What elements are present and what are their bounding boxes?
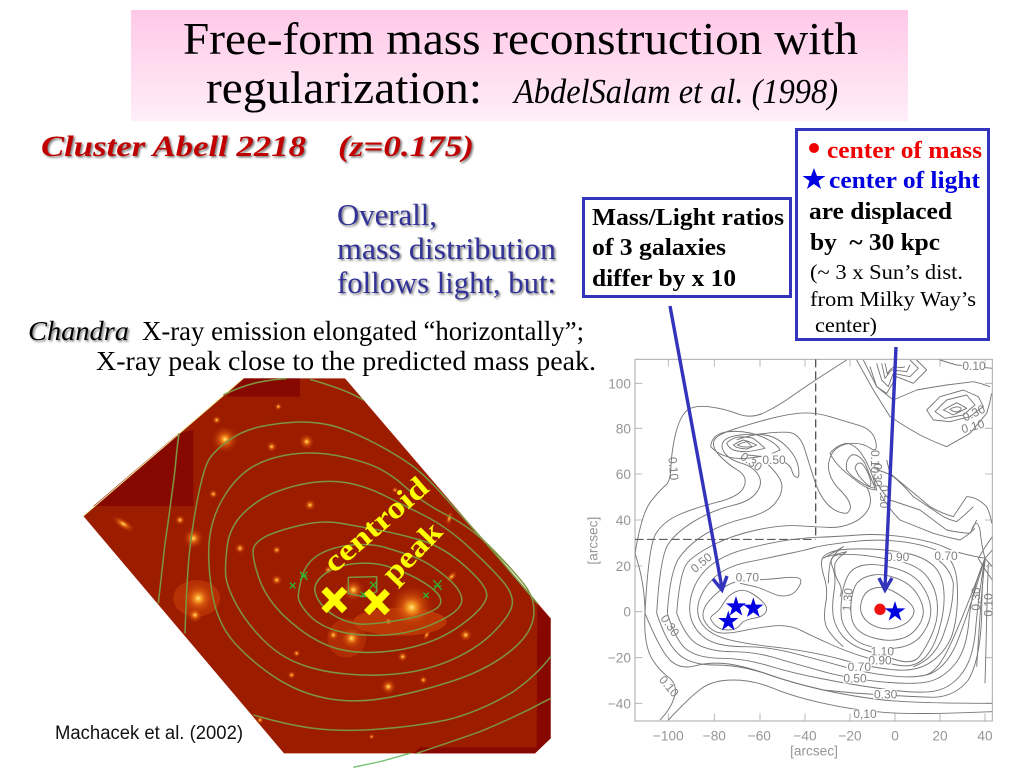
title banner: AbdelSalam et al. (1998)	[512, 72, 838, 111]
contour value labels: 0.90	[886, 550, 910, 564]
axis tick labels: −20	[838, 729, 862, 744]
contour value labels: 0.10	[656, 673, 682, 700]
central small peak	[830, 443, 877, 490]
callout: mass/light ratios: Mass/Light ratios	[592, 205, 784, 231]
contour value labels: 0.50	[877, 485, 891, 509]
contour value labels: 0.70	[848, 660, 871, 674]
text block: overall statement: mass distribution	[337, 231, 557, 266]
small green X-ray markers	[290, 572, 442, 598]
axis tick labels: −40	[793, 729, 817, 744]
axis tick labels: 40	[977, 729, 993, 744]
axis tick labels: [arcsec]	[790, 743, 838, 758]
callout: mass/light ratios: of 3 galaxies	[592, 235, 726, 261]
icon: red dot	[809, 143, 819, 153]
panel: Chandra X-ray image	[83, 378, 551, 767]
X-ray contours	[158, 379, 551, 753]
contour value labels: 0.30	[960, 402, 988, 424]
lower right fan of lines	[927, 558, 985, 675]
contour value labels: 0.70	[736, 571, 759, 585]
contour value labels: 1.30	[840, 587, 856, 612]
contour value labels: 0.30	[870, 463, 884, 487]
callout: centers displaced: center)	[815, 313, 877, 337]
contour value labels: 0.30	[738, 449, 765, 474]
callout: centers displaced: from Milky Way’s	[810, 287, 976, 311]
label: centroid: centroid	[317, 470, 435, 579]
contour value labels: 0.10	[665, 456, 681, 481]
axis tick labels: 60	[616, 467, 631, 482]
contour value labels: 0.10	[868, 450, 882, 474]
galaxies	[109, 403, 472, 740]
heading: cluster name: (z=0.175)	[338, 130, 474, 163]
text block: overall statement: Overall,	[337, 197, 437, 232]
callout: centers displaced: (~ 3 x Sun’s dist.	[810, 260, 963, 284]
axis tick labels	[585, 376, 993, 758]
arrow: to centers	[879, 347, 896, 590]
contour value labels: 0.70	[934, 549, 958, 563]
yellow crosses	[324, 589, 387, 613]
axis tick labels: [arcsec]	[585, 517, 600, 565]
text block: overall statement: follows light, but:	[337, 265, 556, 300]
plot frame and ticks	[635, 359, 992, 721]
text block: Chandra description: X-ray emission elongated “horizontally”;	[142, 316, 584, 346]
axis tick labels: 20	[932, 729, 948, 744]
contour value labels: 0.90	[868, 653, 892, 667]
label: peak: peak	[375, 515, 449, 590]
contour value labels	[656, 359, 996, 721]
axis tick labels: 20	[616, 559, 631, 574]
axis tick labels: 0	[623, 605, 631, 620]
contour value labels: 0.50	[843, 672, 867, 686]
axis tick labels: 100	[608, 376, 631, 391]
callout: mass/light ratios: differ by x 10	[592, 266, 736, 292]
contour value labels: 0.10	[962, 359, 986, 373]
axis tick labels: −40	[608, 696, 631, 711]
heading: cluster name: Cluster Abell 2218	[41, 130, 306, 163]
left high ridge	[711, 431, 780, 459]
contour value labels: 0.10	[982, 593, 996, 617]
contour value labels: 0.30	[969, 587, 983, 611]
stars and centre of mass marker	[718, 596, 905, 630]
contour value labels: 0.30	[874, 687, 898, 701]
contour value labels: 0.10	[960, 417, 986, 436]
axis tick labels: 80	[616, 421, 631, 436]
contour value labels: 1.10	[871, 644, 894, 658]
text block: Chandra description: X-ray peak close to the predicted mass peak.	[96, 346, 596, 376]
callout: centers displaced: center of mass	[827, 138, 982, 164]
text block: overall statement	[337, 197, 557, 300]
callout: centers displaced: by ~ 30 kpc	[810, 230, 940, 256]
contour value labels: 0.50	[762, 453, 786, 467]
top right peaks	[857, 360, 992, 447]
icon: blue star	[802, 168, 826, 189]
contour value labels: 0.50	[688, 550, 715, 576]
title banner: Free-form mass reconstruction with	[183, 13, 858, 64]
callout: centers displaced: center of light	[829, 168, 980, 194]
axis tick labels: −60	[748, 729, 771, 744]
axis tick labels: 40	[616, 513, 631, 528]
0.30 outer ridge	[645, 413, 876, 613]
credit: Machacek et al.: Machacek et al. (2002)	[55, 723, 243, 744]
axis tick labels: −20	[608, 651, 631, 666]
arrow: to galaxies	[670, 306, 727, 590]
callout: mass/light ratios	[584, 198, 790, 296]
axis tick labels: 0	[891, 729, 899, 744]
title banner	[131, 10, 908, 121]
contour lines	[635, 360, 992, 720]
contour value labels: 0.30	[658, 612, 683, 639]
dashed crosshair	[635, 359, 816, 539]
chart: mass contour map	[585, 359, 996, 758]
callout: centers displaced: are displaced	[809, 199, 953, 225]
axis tick labels: −80	[703, 729, 726, 744]
contour value labels: 0,10	[853, 707, 877, 721]
text block: Chandra description: Chandra	[28, 316, 129, 346]
heading: cluster name	[41, 130, 474, 163]
axis tick labels: −100	[653, 729, 684, 744]
text block: Chandra description	[28, 316, 596, 376]
title banner: regularization:	[206, 62, 482, 113]
callout: centers displaced	[796, 130, 988, 340]
